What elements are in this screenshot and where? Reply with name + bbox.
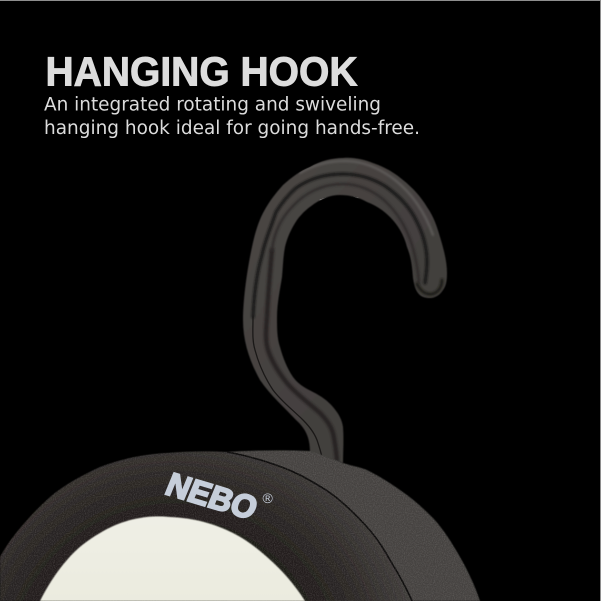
front ring (0, 451, 412, 601)
ring groove (227, 452, 412, 601)
registered mark: ® (262, 490, 274, 506)
main groove (253, 174, 427, 317)
title: HANGING HOOK (46, 48, 358, 94)
secondary groove (266, 250, 337, 460)
body texture (0, 440, 490, 601)
description text: An integrated rotating and swiveling (44, 94, 381, 116)
lens (40, 516, 305, 601)
rear housing (227, 450, 480, 601)
hook highlights (300, 161, 433, 235)
hanging hook (243, 158, 447, 463)
description text: hanging hook ideal for going hands-free. (44, 118, 420, 139)
description text (44, 94, 420, 139)
NEBO logo: NEBO (161, 466, 263, 526)
lantern body (0, 440, 490, 601)
